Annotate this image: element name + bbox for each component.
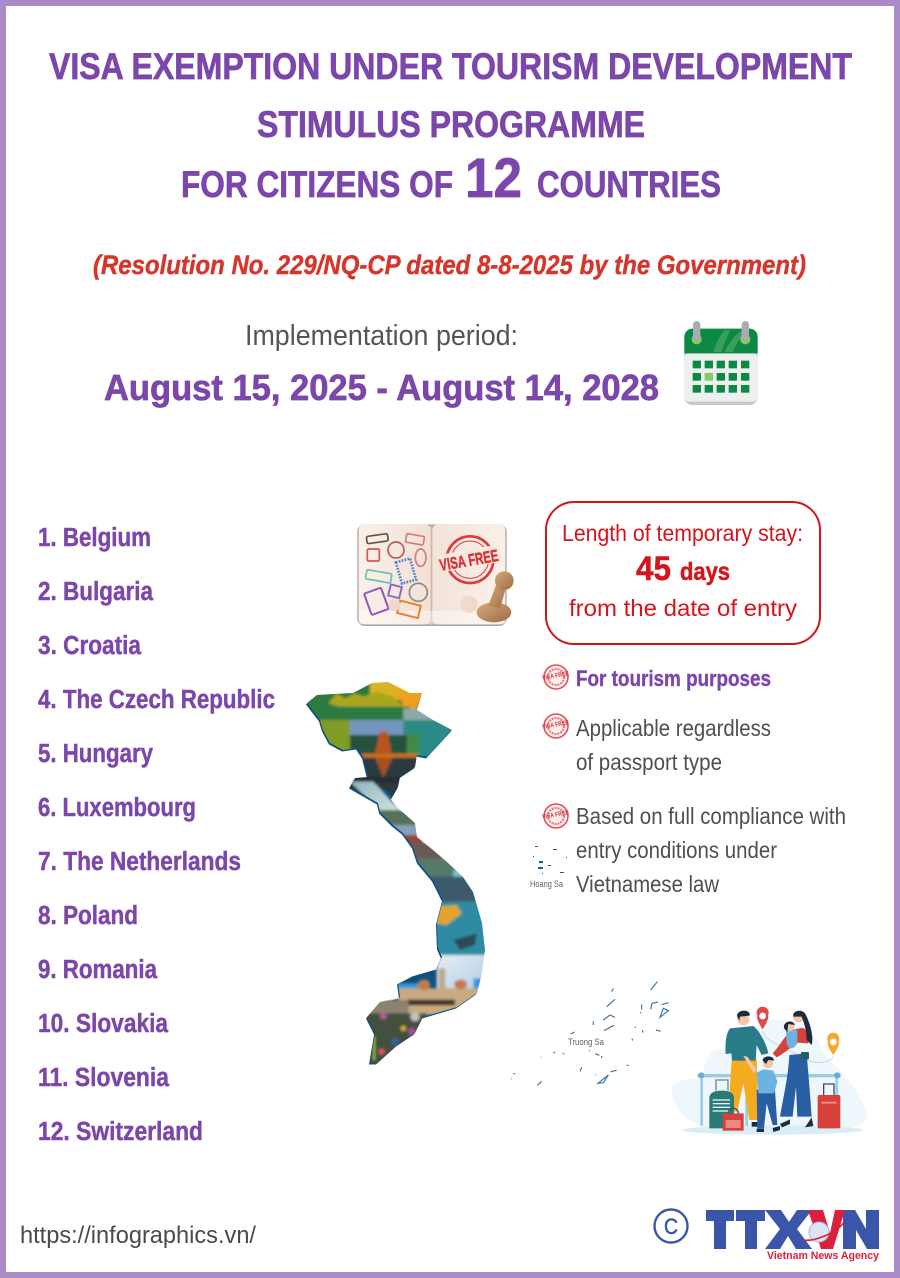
text: entry conditions: Vietnamese law — [576, 871, 720, 897]
icon: calendar — [684, 321, 758, 405]
conditions list — [542, 665, 846, 897]
title: 12 — [465, 146, 522, 209]
callout: length of temporary stay: Length of temporary stay: — [562, 520, 803, 546]
title: COUNTRIES — [537, 164, 721, 205]
text: entry conditions — [576, 803, 846, 897]
islands: Truong Sa: Truong Sa — [568, 1037, 605, 1048]
country list: 5. Hungary — [38, 740, 154, 768]
icon: visa free stamp 3 — [542, 804, 570, 828]
title: FOR CITIZENS OF — [181, 164, 453, 205]
country list: 9. Romania — [38, 956, 158, 984]
icon: visa free passport: VISA FREE — [438, 546, 500, 575]
callout: length of temporary stay: from the date of entry — [569, 595, 797, 621]
red suitcase — [818, 1084, 840, 1128]
icon: visa free stamp 2 — [542, 714, 570, 738]
islands: Hoang Sa: Hoang Sa — [530, 879, 563, 889]
icon: visa free passport — [357, 524, 514, 626]
country list: 2. Bulgaria — [38, 578, 154, 606]
logo: TTXVN Vietnam News Agency: Vietnam News Agency — [767, 1250, 880, 1262]
icon: visa free stamp 1 — [542, 665, 570, 689]
country list: 6. Luxembourg — [38, 794, 196, 822]
resolution subtitle: (Resolution No. 229/NQ-CP dated 8-8-2025 by the Government) — [93, 250, 806, 280]
icon: visa free stamp 2: VISA FREE — [542, 719, 570, 731]
logo: TTXVN Vietnam News Agency — [654, 1210, 880, 1262]
icon: visa free stamp 3: VISA FREE — [542, 809, 570, 821]
title: STIMULUS PROGRAMME — [257, 104, 645, 145]
copyright symbol — [654, 1210, 688, 1242]
country list: 8. Poland — [38, 902, 138, 930]
green suitcase and red bag — [709, 1080, 744, 1131]
woman and child — [773, 1011, 813, 1127]
text: passport type: Applicable regardless — [576, 715, 771, 741]
illustration: travelling family — [672, 1007, 867, 1135]
implementation period: August 15, 2025 - August 14, 2028 — [104, 367, 659, 408]
country list: 4. The Czech Republic — [38, 686, 275, 714]
title — [49, 46, 852, 209]
man — [725, 1011, 768, 1127]
text: passport type — [576, 715, 771, 775]
location pins — [757, 1007, 839, 1062]
country list — [38, 524, 275, 1146]
ground — [682, 1125, 863, 1135]
implementation period — [104, 320, 659, 408]
country list: 10. Slovakia — [38, 1010, 169, 1038]
islands: Truong Sa — [511, 982, 668, 1085]
islands: Hoang Sa — [530, 846, 567, 889]
letters TTXVN — [706, 1210, 879, 1249]
callout: length of temporary stay — [546, 502, 820, 644]
text: passport type: of passport type — [576, 749, 722, 775]
callout: length of temporary stay: 45 — [636, 550, 671, 588]
text: entry conditions: entry conditions under — [576, 837, 777, 863]
background blob — [672, 1019, 867, 1133]
icon: visa free stamp 1: VISA FREE — [542, 670, 570, 682]
text: for tourism purposes: For tourism purposes — [576, 666, 771, 691]
country list: 7. The Netherlands — [38, 848, 241, 876]
boy — [743, 1056, 780, 1132]
map of Vietnam — [300, 677, 490, 1067]
callout: length of temporary stay: days — [680, 558, 730, 586]
implementation period: Implementation period: — [245, 320, 518, 352]
country list: 1. Belgium — [38, 524, 151, 552]
country list: 3. Croatia — [38, 632, 142, 660]
text: entry conditions: Based on full compliance with — [576, 803, 846, 829]
country list: 11. Slovenia — [38, 1064, 170, 1092]
country list: 12. Switzerland — [38, 1118, 203, 1146]
railing — [697, 1072, 841, 1126]
copyright symbol: C — [664, 1214, 678, 1239]
website url: https://infographics.vn/ — [20, 1222, 256, 1249]
